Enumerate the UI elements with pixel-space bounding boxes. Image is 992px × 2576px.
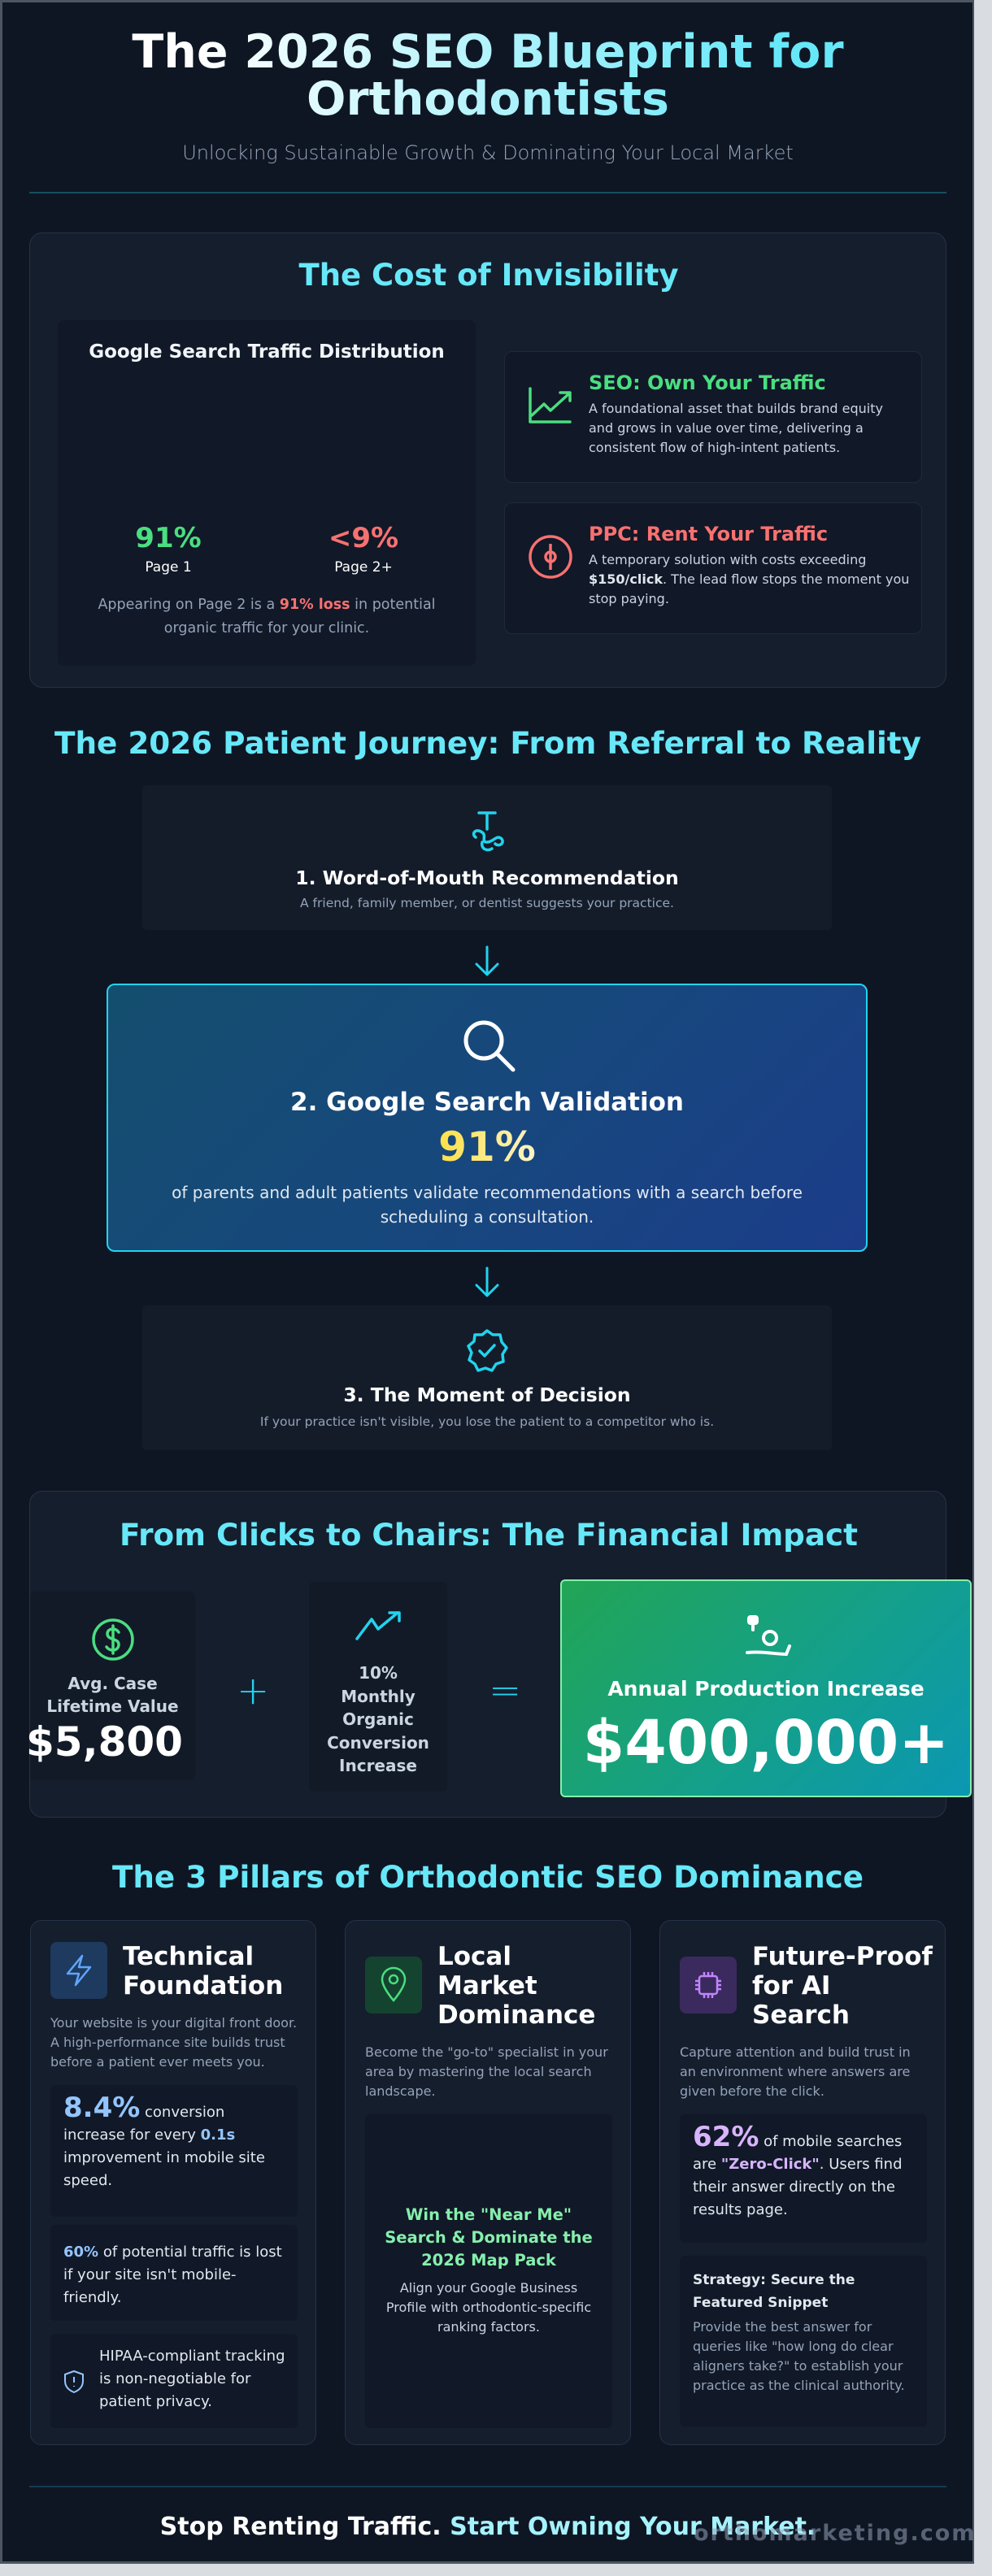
- icon: trend: [355, 1611, 401, 1640]
- stat box: 8.4%: [50, 2085, 298, 2217]
- pillar desc: Become the "go-to" specialist in your area by mastering the local search landscape.: [365, 2044, 608, 2099]
- icon: badge check: [467, 1329, 508, 1372]
- stat: page 1: [135, 522, 202, 576]
- stat box: HIPAA: HIPAA-compliant tracking is non-negotiable for patient privacy.: [99, 2348, 285, 2410]
- pillar desc: an environment where answers are given before the click.: [680, 2064, 910, 2099]
- stat: page 1: 91%: [135, 522, 202, 554]
- pillar desc: Capture attention and build trust in: [680, 2044, 911, 2060]
- icon: chair: [746, 1615, 792, 1656]
- pillar title: [437, 1942, 595, 2030]
- operator equals: =: [489, 1668, 521, 1714]
- label: 10%: [359, 1663, 398, 1683]
- pillar desc: Your website is your digital front door. A high-performance site builds trust before a patient ever meets you.: [50, 2015, 297, 2070]
- watermark: orthomarketing.com: [694, 2521, 976, 2546]
- operator plus: +: [237, 1668, 269, 1714]
- stat box: 62%: [680, 2114, 927, 2243]
- panel: cost of invisibility: [29, 232, 946, 688]
- stat box: 60%: [50, 2225, 298, 2321]
- box: strategy: Provide the best answer for queries like "how long do clear aligners take?" to establish your practice as the clinical authority.: [693, 2319, 904, 2393]
- icon: coin: [529, 535, 572, 579]
- value: $400,000+: [583, 1708, 949, 1778]
- icon: trend: [529, 387, 572, 424]
- label: Lifetime Value: [46, 1696, 179, 1716]
- chart title: Google Search Traffic Distribution: [89, 341, 445, 363]
- title: Orthodontists: [307, 72, 669, 126]
- stat: page 2+: [328, 522, 398, 576]
- label: Annual Production Increase: [607, 1677, 925, 1701]
- label: Organic: [342, 1709, 414, 1729]
- pillar title: Local: [437, 1942, 511, 1971]
- heading: financial impact: From Clicks to Chairs: The Financial Impact: [120, 1517, 858, 1553]
- pillar title: for AI: [752, 1971, 830, 2000]
- heading: cost of invisibility: The Cost of Invisibility: [298, 258, 679, 293]
- box: strategy: Strategy: Secure the Featured Snippet: [693, 2272, 855, 2311]
- stat box: 60%: 60% of potential traffic is lost if your site isn't mobile-friendly.: [63, 2244, 282, 2306]
- stat: page 2+: <9%: [328, 522, 398, 554]
- arrow: [475, 1266, 499, 1297]
- text: PPC: A temporary solution with costs exceeding $150/click. The lead flow stops the moment you stop paying.: [589, 552, 909, 606]
- icon: referral: [472, 811, 504, 852]
- box: strategy: [680, 2256, 927, 2426]
- text: SEO: A foundational asset that builds brand equity and grows in value over time, delivering a consistent flow of high-intent patients.: [589, 401, 883, 455]
- pillar title: Dominance: [437, 2000, 595, 2030]
- item: case value: [30, 1592, 195, 1780]
- pillar 3: AI: [659, 1920, 946, 2445]
- heading: pillars: The 3 Pillars of Orthodontic SEO Dominance: [112, 1859, 864, 1895]
- stat box: 62%: 62% of mobile searches are "Zero-Click". Users find their answer directly on the results page.: [693, 2121, 903, 2218]
- heading: patient journey: The 2026 Patient Journey: From Referral to Reality: [54, 725, 921, 761]
- pillar title: Search: [752, 2000, 850, 2030]
- pillar title: Technical: [123, 1942, 254, 1971]
- card: SEO: [504, 351, 922, 483]
- item: conversion: [309, 1582, 447, 1792]
- step 2 desc: of parents and adult patients validate recommendations with a search before scheduling a consultation.: [172, 1183, 803, 1227]
- pillar 1: technical: [30, 1920, 316, 2445]
- title: The 2026 SEO Blueprint for: [132, 25, 844, 79]
- stat: page 2+: Page 2+: [334, 559, 393, 576]
- subtitle: Unlocking Sustainable Growth & Dominating Your Local Market: [182, 141, 794, 164]
- label: Avg. Case: [67, 1674, 158, 1693]
- pillar desc: [680, 2044, 911, 2099]
- label: [46, 1674, 179, 1716]
- step 2 title: 2. Google Search Validation: [290, 1088, 684, 1117]
- box: near me: Align your Google Business Profile with orthodontic-specific ranking factors.: [386, 2280, 591, 2335]
- stat 91%: 91%: [438, 1123, 536, 1171]
- step 3 title: 3. The Moment of Decision: [343, 1384, 631, 1406]
- box: near me: [365, 2114, 612, 2428]
- text: SEO: [589, 371, 883, 455]
- stat box: 8.4%: 8.4% conversion increase for every 0.1s improvement in mobile site speed.: [63, 2092, 265, 2189]
- step 1 title: 1. Word-of-Mouth Recommendation: [295, 867, 679, 889]
- label: Increase: [339, 1756, 417, 1775]
- step 3 desc: If your practice isn't visible, you lose the patient to a competitor who is.: [260, 1414, 714, 1429]
- text: SEO: SEO: Own Your Traffic: [589, 371, 826, 394]
- text: PPC: [589, 523, 909, 606]
- pillar title: Future-Proof: [752, 1942, 933, 1971]
- box: near me: Win the "Near Me" Search & Dominate the 2026 Map Pack: [385, 2205, 593, 2270]
- stat: page 1: Page 1: [145, 559, 192, 576]
- text: PPC: PPC: Rent Your Traffic: [589, 523, 828, 545]
- icon: search: [463, 1021, 516, 1071]
- icon: dollar: [92, 1618, 134, 1661]
- arrow: [475, 946, 499, 976]
- panel: financial impact: [29, 1491, 946, 1818]
- stat box: HIPAA: [50, 2334, 298, 2428]
- label: Monthly: [341, 1686, 416, 1705]
- step 2 highlight: [107, 984, 868, 1252]
- step 3: [142, 1305, 832, 1450]
- pillar 2: local: [345, 1920, 631, 2445]
- label: Conversion: [327, 1733, 429, 1753]
- step 1: [142, 785, 832, 930]
- card: traffic distribution: [58, 320, 476, 666]
- step 1 desc: A friend, family member, or dentist suggests your practice.: [300, 896, 674, 910]
- pillar title: Market: [437, 1971, 537, 2000]
- icon: chip: [680, 1957, 737, 2013]
- footer tagline: Stop Renting Traffic. Start Owning Your Market.: [160, 2513, 816, 2541]
- pillar title: Foundation: [123, 1971, 283, 2000]
- title: [2, 28, 973, 123]
- pillar title: [123, 1942, 283, 2000]
- label: [327, 1663, 429, 1775]
- icon: shield: [64, 2370, 84, 2393]
- card: PPC: [504, 502, 922, 634]
- icon: pin: [365, 1957, 422, 2013]
- result: annual production: [560, 1579, 972, 1797]
- value: $5,800: [26, 1718, 183, 1766]
- icon: bolt: [50, 1942, 107, 1999]
- pillar title: [752, 1942, 933, 2030]
- caption: Appearing on Page 2 is a 91% loss in potential organic traffic for your clinic.: [98, 597, 436, 636]
